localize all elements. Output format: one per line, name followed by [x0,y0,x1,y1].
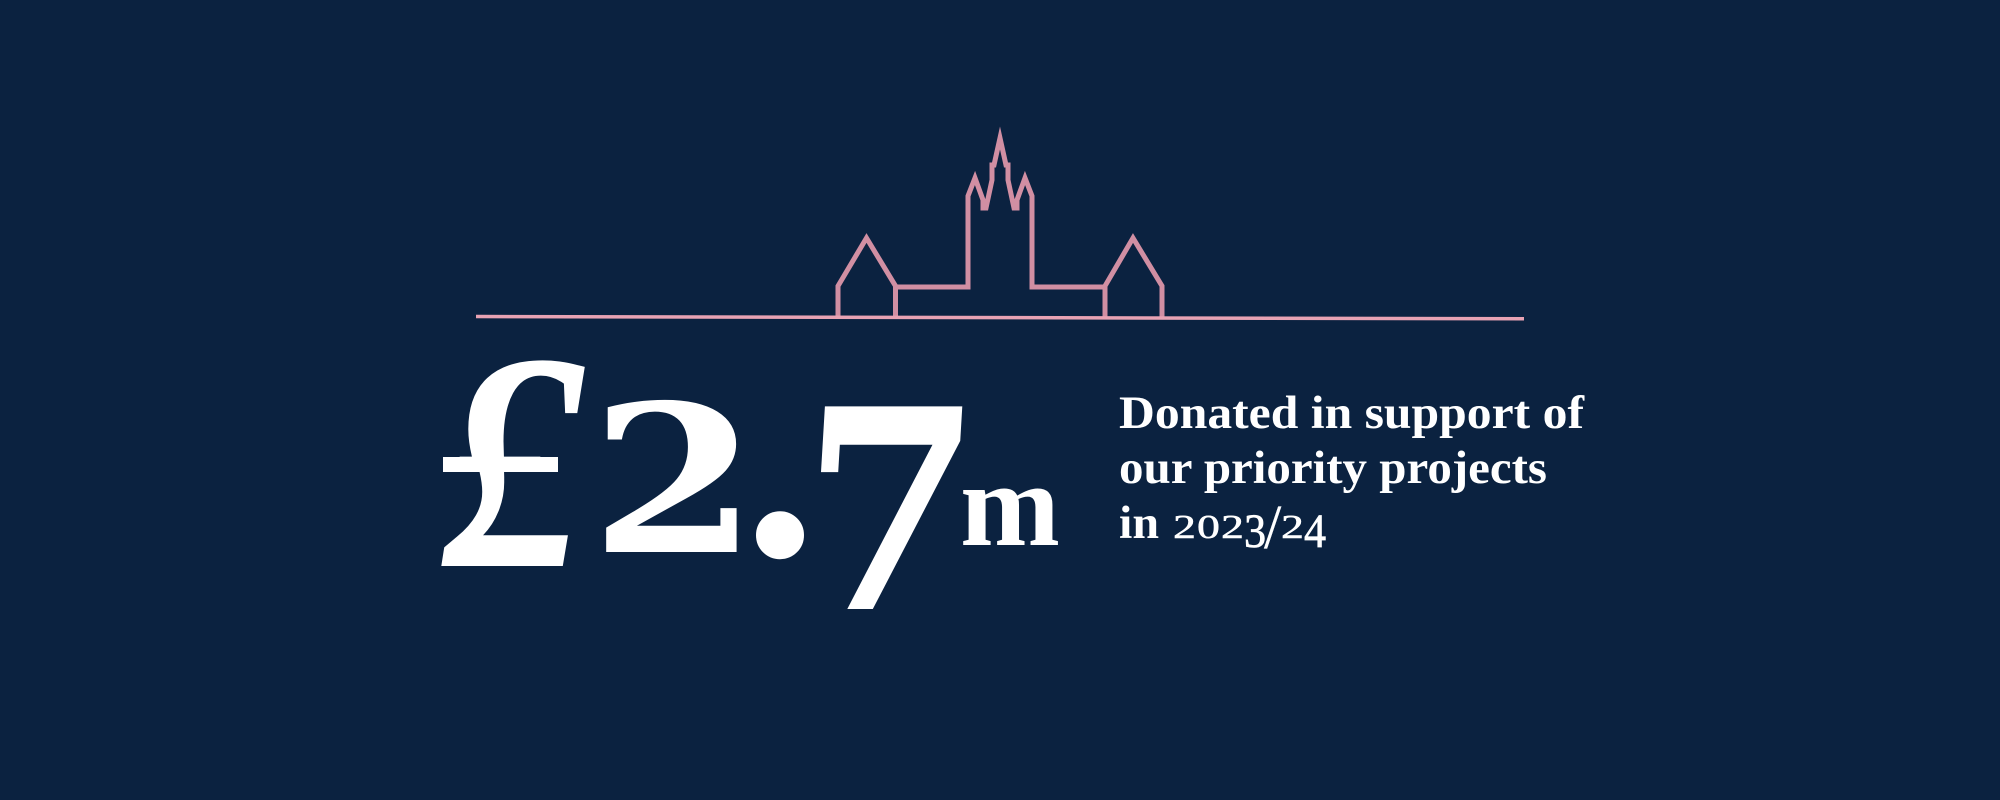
description text: our priority projects [1119,442,1547,494]
old-style year numerals [1173,494,1326,562]
big figure: £2.7m [438,290,1060,675]
old-style year numerals: 2 [1221,508,1244,546]
old-style year numerals: 2 [1281,508,1304,546]
old-style year numerals: 4 [1304,505,1326,557]
ground line [476,315,1524,320]
description text [1119,387,1585,562]
pound sign crossbar [443,457,558,472]
description text: Donated in support of [1119,387,1585,439]
central tower and wings [896,138,1105,287]
big figure: £2.7m: 7 [789,349,987,675]
big figure: £2.7m: m [960,438,1060,571]
big figure: £2.7m: 2 [590,359,758,600]
old-style year numerals: 3 [1244,505,1266,557]
old-style year numerals: / [1264,494,1282,562]
big figure: £2.7m: . [743,292,817,620]
left house [838,238,896,317]
big figure: £2.7m: £ [438,290,589,634]
right house [1105,238,1162,317]
description text: in [1119,497,1159,549]
icon: castle skyline [838,138,1162,317]
old-style year numerals: 0 [1197,508,1220,546]
old-style year numerals: 2 [1173,508,1196,546]
